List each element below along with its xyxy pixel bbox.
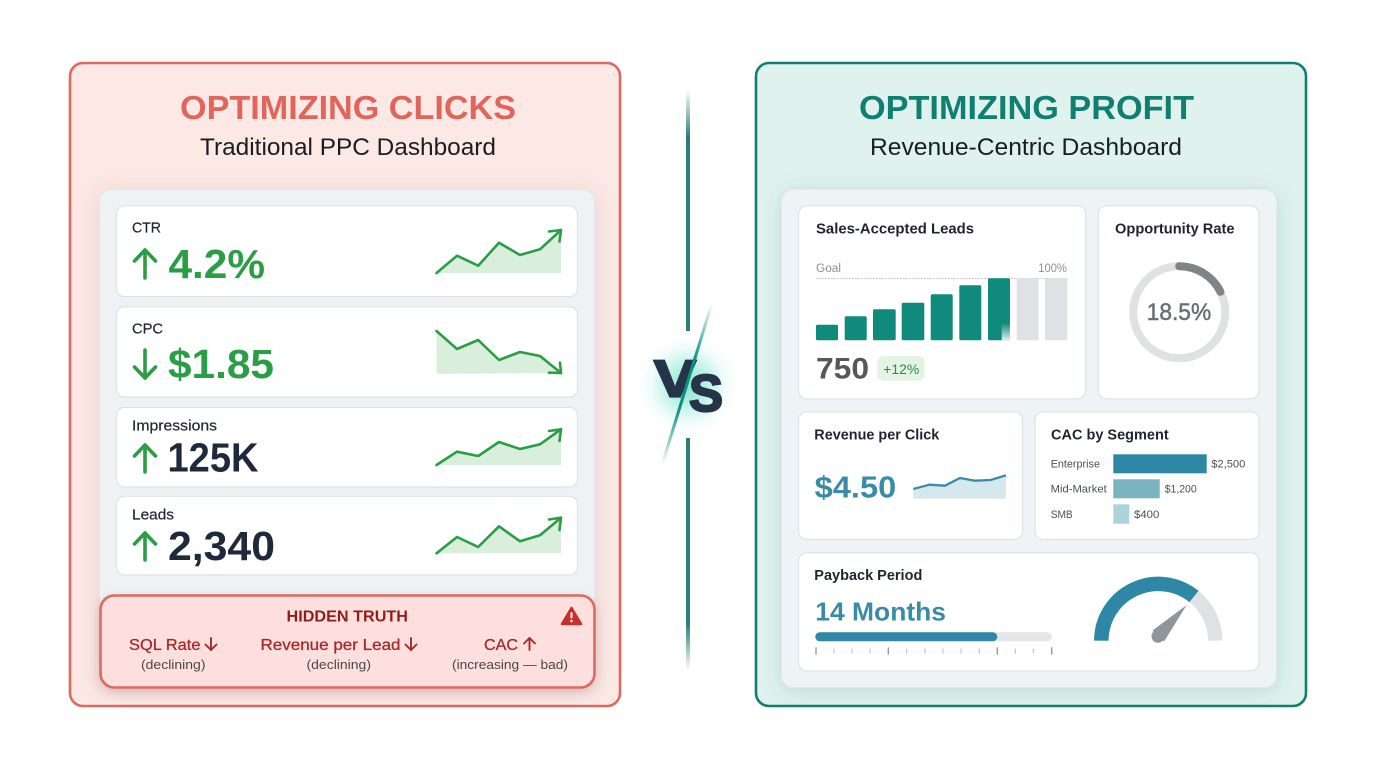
metric: CAC: CAC xyxy=(484,637,518,654)
card: CAC by segment xyxy=(1035,412,1259,539)
heading: optimizing profit: OPTIMIZING PROFIT xyxy=(859,90,1195,127)
metric: revenue per lead xyxy=(260,637,416,672)
metric: SQL rate: (declining) xyxy=(141,657,206,672)
panel: optimizing profit xyxy=(756,63,1306,706)
versus divider xyxy=(638,90,738,670)
card: CAC by segment: CAC by Segment xyxy=(1051,427,1169,443)
badge: +12% xyxy=(877,356,925,381)
metric: CAC: (increasing — bad) xyxy=(452,657,568,672)
card: payback period: Payback Period xyxy=(814,568,922,584)
metric card: CPC: CPC xyxy=(132,322,163,338)
card: revenue per click: $4.50 xyxy=(815,471,896,505)
callout heading: HIDDEN TRUTH xyxy=(286,609,408,626)
card: sales-accepted leads: 750 xyxy=(816,352,869,385)
bar: mid-market: Mid-Market xyxy=(1051,484,1107,496)
metric: SQL rate xyxy=(129,637,216,672)
donut chart xyxy=(1133,266,1225,358)
bar: SMB: SMB xyxy=(1051,509,1073,521)
card: payback period: 14 Months xyxy=(815,597,946,627)
metric: SQL rate: SQL Rate xyxy=(129,637,201,654)
card: opportunity rate: Opportunity Rate xyxy=(1115,221,1234,237)
metric card: impressions: Impressions xyxy=(132,419,217,435)
VS text xyxy=(654,350,723,423)
bar: enterprise: $2,500 xyxy=(1211,459,1245,471)
card: sales-accepted leads: Sales-Accepted Leads xyxy=(816,221,974,237)
gauge xyxy=(1101,584,1215,643)
dashboard container xyxy=(100,190,594,684)
metric card: leads xyxy=(116,496,578,575)
metric: revenue per lead: Revenue per Lead xyxy=(260,637,400,654)
card: revenue per click: Revenue per Click xyxy=(814,427,940,443)
metric card: leads: Leads xyxy=(132,507,174,523)
metric card: CPC: $1.85 xyxy=(168,341,274,387)
card: sales-accepted leads: 100% xyxy=(1038,263,1067,275)
heading: optimizing clicks: OPTIMIZING CLICKS xyxy=(180,90,516,127)
subheading: traditional PPC dashboard: Traditional PPC Dashboard xyxy=(200,134,496,161)
bar: mid-market xyxy=(1051,479,1197,498)
card: sales-accepted leads xyxy=(798,206,1086,399)
badge: +12%: +12% xyxy=(883,361,919,377)
metric card: leads: 2,340 xyxy=(168,523,275,569)
metric card: CTR xyxy=(116,206,578,296)
VS text: S xyxy=(689,365,723,423)
panel: optimizing clicks xyxy=(70,63,620,706)
metric card: CTR: 4.2% xyxy=(168,241,265,287)
metric: CAC xyxy=(452,637,568,672)
card: opportunity rate xyxy=(1098,206,1259,399)
bar: enterprise xyxy=(1051,454,1245,473)
bar: SMB xyxy=(1051,504,1159,524)
callout: hidden truth xyxy=(100,596,594,688)
metric: revenue per lead: (declining) xyxy=(306,657,371,672)
VS text: V xyxy=(654,350,696,408)
bar: mid-market: $1,200 xyxy=(1165,484,1197,496)
card: payback period xyxy=(798,553,1259,671)
progress bar xyxy=(815,632,1052,655)
card: revenue per click xyxy=(798,412,1022,539)
bar: SMB: $400 xyxy=(1134,509,1159,521)
metric card: impressions xyxy=(116,408,578,487)
icon: warning triangle xyxy=(562,608,581,624)
dashboard container xyxy=(782,190,1276,688)
donut chart: 18.5% xyxy=(1147,299,1211,326)
subheading: revenue-centric dashboard: Revenue-Centric Dashboard xyxy=(870,134,1182,161)
bar chart: leads vs goal xyxy=(816,278,1067,340)
sparkline xyxy=(913,475,1006,499)
card: sales-accepted leads: Goal xyxy=(816,263,841,275)
metric card: CPC xyxy=(116,307,578,397)
metric card: impressions: 125K xyxy=(168,435,259,481)
metric card: CTR: CTR xyxy=(132,221,161,237)
bar: enterprise: Enterprise xyxy=(1051,459,1100,471)
